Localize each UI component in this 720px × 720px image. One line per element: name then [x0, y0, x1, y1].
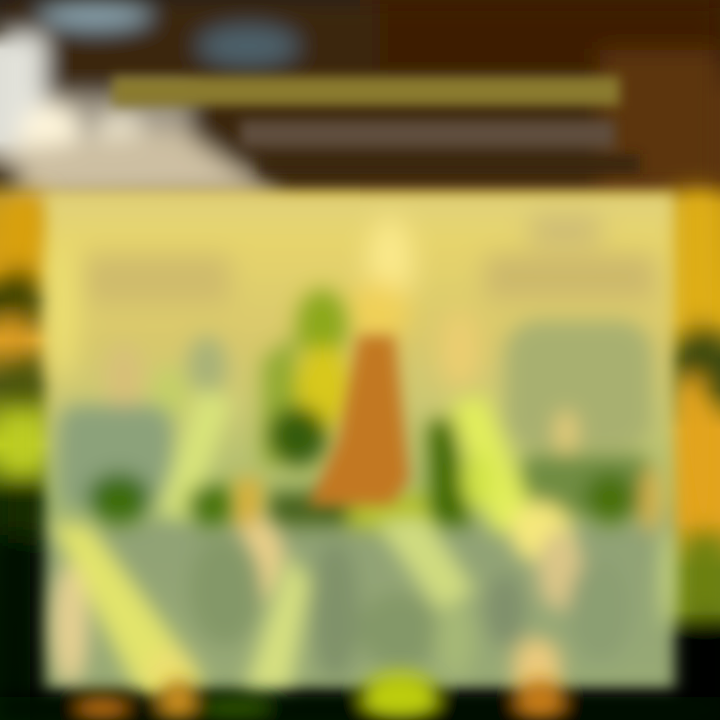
- left plant panel: [58, 336, 238, 527]
- orange figure: [308, 335, 410, 505]
- right plant panel: [428, 320, 662, 562]
- upper text blocks: [46, 215, 655, 390]
- tan stem: [235, 478, 284, 600]
- right side foliage: [668, 190, 720, 720]
- left side foliage: [0, 195, 45, 720]
- title band: [112, 76, 620, 106]
- center plant panel: [262, 289, 435, 528]
- bottom strip: [0, 672, 720, 720]
- lower plant panels: [48, 516, 675, 705]
- header photo background: [0, 0, 720, 200]
- panel background: [45, 192, 675, 690]
- subtitle band: [240, 120, 640, 174]
- main panel: [45, 192, 675, 705]
